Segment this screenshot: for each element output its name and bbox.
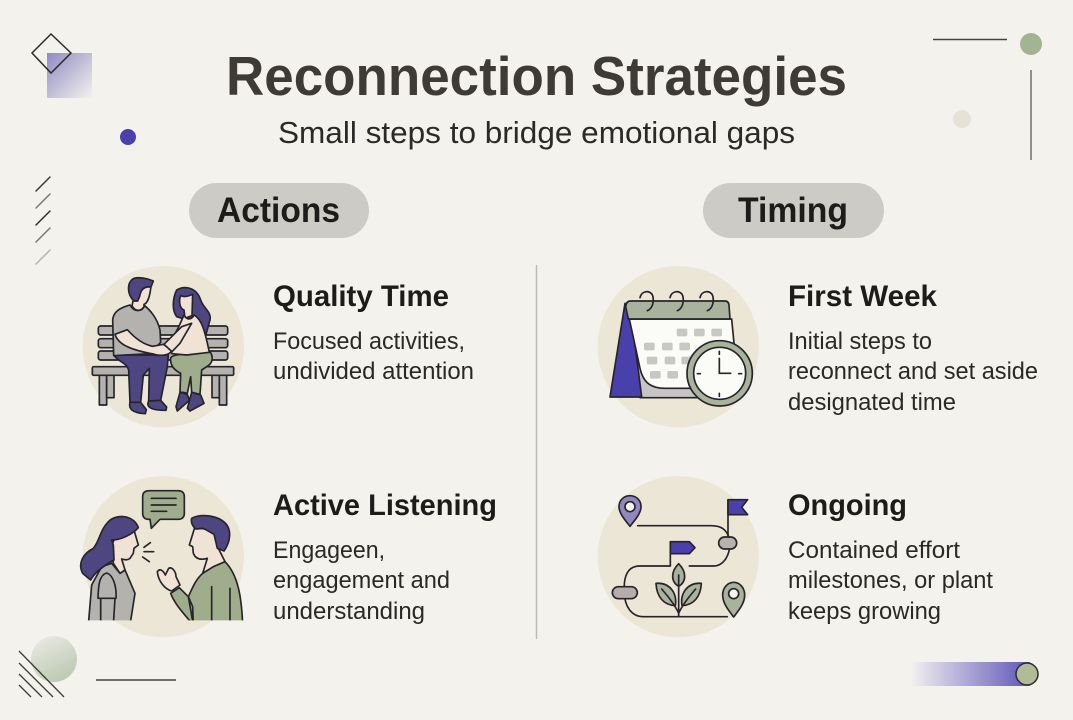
man body <box>171 562 243 625</box>
center divider <box>536 265 538 639</box>
woman neck and face <box>113 525 138 573</box>
item: Ongoing: Ongoing <box>788 489 907 522</box>
pin top <box>619 496 641 526</box>
icon: couple on bench <box>83 266 244 427</box>
item: Ongoing: Contained effort <box>788 537 960 564</box>
item: Ongoing: keeps growing <box>788 598 941 625</box>
item: Active Listening <box>273 489 497 625</box>
item: First Week: First Week <box>788 280 937 313</box>
woman hair <box>173 288 210 334</box>
decoration: bottom left ball and hatch <box>19 636 176 697</box>
man neck and face <box>189 528 225 573</box>
item: Quality Time: undivided attention <box>273 358 474 385</box>
item: Active Listening: Engageen, <box>273 537 385 564</box>
icon: roadmap with plant <box>598 476 759 637</box>
item: Ongoing <box>788 489 993 625</box>
man hand <box>157 568 180 591</box>
decoration: top right lines and dots <box>933 33 1042 160</box>
item: First Week <box>788 280 1038 416</box>
item: Quality Time <box>273 280 474 385</box>
woman face <box>180 294 193 318</box>
sound lines <box>143 543 154 562</box>
route <box>624 526 730 617</box>
icon: calendar and clock <box>598 266 759 427</box>
man hair <box>128 278 153 301</box>
arms and hands <box>115 330 172 355</box>
flag top <box>725 500 730 537</box>
woman hair <box>81 517 138 580</box>
item: First Week: Initial steps to <box>788 328 932 355</box>
woman legs <box>171 352 212 394</box>
decoration: bottom right gradient bar <box>912 662 1038 686</box>
item: First Week: reconnect and set aside <box>788 358 1038 385</box>
man hair <box>191 516 230 551</box>
man legs <box>114 355 168 402</box>
subtitle: Small steps to bridge emotional gaps <box>278 115 795 150</box>
decoration: diagonal dashes <box>36 177 50 264</box>
heading pill: Timing <box>703 183 884 238</box>
flag mid <box>668 542 673 566</box>
man shirt <box>113 305 161 356</box>
item: Active Listening: engagement and <box>273 567 450 594</box>
item: Quality Time: Quality Time <box>273 280 449 313</box>
plant <box>673 564 685 586</box>
woman body <box>88 563 135 625</box>
item: Quality Time: Focused activities, <box>273 328 465 355</box>
item: Ongoing: milestones, or plant <box>788 567 993 594</box>
woman top <box>169 315 209 355</box>
speech bubble <box>143 491 184 528</box>
icon: two people talking <box>81 476 244 637</box>
item: First Week: designated time <box>788 389 956 416</box>
nodes <box>719 537 737 549</box>
decoration: indigo dot <box>120 129 136 145</box>
decoration: diamond with gradient square <box>32 34 92 98</box>
pin bottom <box>723 582 745 617</box>
heading pill: Actions <box>189 183 369 238</box>
man neck and face <box>132 285 151 310</box>
item: Active Listening: Active Listening <box>273 489 497 522</box>
heading pill: Actions: Actions <box>217 191 340 230</box>
item: Active Listening: understanding <box>273 598 425 625</box>
heading pill: Timing: Timing <box>738 191 848 230</box>
title: Reconnection Strategies <box>226 45 847 107</box>
